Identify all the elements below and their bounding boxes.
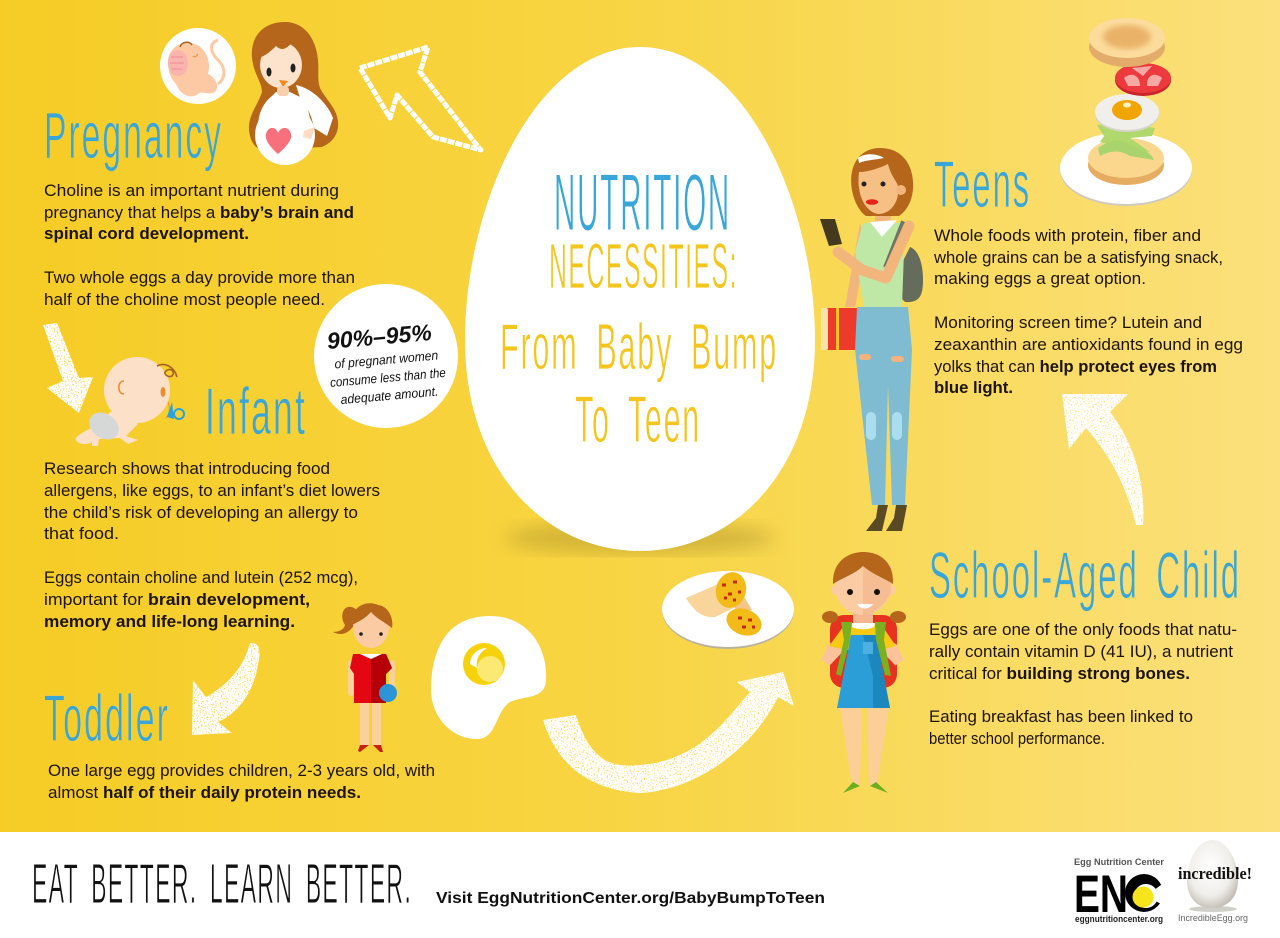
logo: incredible egg: incredible! xyxy=(1178,864,1252,883)
text: teens body: whole grains can be a satisfying snack, xyxy=(933,248,1223,267)
logo: incredible egg xyxy=(1178,840,1252,924)
callout: 90-95%: of pregnant women xyxy=(334,347,439,371)
icon: egg sandwich xyxy=(1060,18,1192,206)
text: school-aged body: critical for building strong bones. xyxy=(929,664,1190,683)
infographic canvas: NECESSITIES: xyxy=(549,230,738,302)
icon: pregnant woman xyxy=(249,22,338,165)
infographic canvas: Teens xyxy=(934,147,1031,221)
callout: 90-95%: adequate amount. xyxy=(340,384,439,407)
logo: incredible egg: IncredibleEgg.org xyxy=(1178,913,1248,924)
text: toddler body: almost half of their daily protein needs. xyxy=(48,783,361,802)
footer URL: Visit EggNutritionCenter.org/BabyBumpToTeen xyxy=(436,890,825,907)
logo: Egg Nutrition Center: eggnutritioncenter.org xyxy=(1075,914,1163,924)
text: teens body: yolks that can help protect eyes from xyxy=(934,357,1217,376)
icon: burrito plate xyxy=(662,569,794,649)
text: teens body: blue light. xyxy=(934,378,1013,397)
icon: fried egg xyxy=(431,616,546,739)
icon: fetus with brain xyxy=(160,28,236,104)
arrow: infant to toddler xyxy=(192,643,260,735)
text: infant body: Research shows that introducing food xyxy=(44,459,330,478)
text: teens body xyxy=(933,226,1243,397)
text: school-aged body: better school performance. xyxy=(929,729,1105,748)
text: infant body: that food. xyxy=(44,524,119,543)
infographic canvas: From Baby Bump xyxy=(500,310,778,383)
callout: 90-95%: 90%–95% xyxy=(326,319,433,354)
logo: Egg Nutrition Center: EN xyxy=(1074,865,1128,924)
text: infant body: the child’s risk of developing an allergy to xyxy=(44,503,358,522)
arrow: pregnancy to infant xyxy=(43,323,93,413)
text: school-aged body: Eggs are one of the only foods that natu- xyxy=(929,620,1237,639)
heading: Pregnancy: Pregnancy xyxy=(44,98,223,172)
text: school-aged body: rally contain vitamin D (41 IU), a nutrient xyxy=(929,642,1233,661)
text: school-aged body: Eating breakfast has been linked to xyxy=(929,707,1193,726)
arrow: egg to school-aged child xyxy=(543,672,794,793)
text: infant body xyxy=(44,459,380,631)
text: teens body: Monitoring screen time? Lutein and xyxy=(934,313,1202,332)
logo: Egg Nutrition Center: Egg Nutrition Center xyxy=(1074,857,1165,867)
infographic canvas: NUTRITION xyxy=(554,158,731,248)
heading: Infant: Infant xyxy=(205,374,307,448)
text: pregnancy body: Two whole eggs a day provide more than xyxy=(44,268,355,287)
arrow: school-aged to teens xyxy=(1062,394,1143,525)
text: teens body: zeaxanthin are antioxidants found in egg xyxy=(934,335,1243,354)
icon: toddler girl xyxy=(333,603,397,752)
text: teens body: Whole foods with protein, fiber and xyxy=(934,226,1201,245)
title: To Teen xyxy=(575,382,701,456)
text: pregnancy body: pregnancy that helps a baby’s brain and xyxy=(44,203,354,222)
heading: Toddler: Toddler xyxy=(44,681,170,755)
arrow: egg to pregnancy xyxy=(360,47,481,150)
text: pregnancy body: half of the choline most people need. xyxy=(44,290,325,309)
text: infant body: allergens, like eggs, to an infant’s diet lowers xyxy=(44,481,380,500)
text: infant body: important for brain development, xyxy=(44,590,310,609)
text: school-aged body xyxy=(929,620,1237,748)
callout: 90-95%: consume less than the xyxy=(329,365,446,390)
icon: crawling baby xyxy=(76,357,184,446)
text: infant body: memory and life-long learning. xyxy=(44,612,295,631)
text: pregnancy body: Choline is an important nutrient during xyxy=(44,181,339,200)
callout: 90-95% xyxy=(314,284,458,428)
text: pregnancy body xyxy=(44,181,355,309)
central egg xyxy=(465,47,815,554)
title xyxy=(500,158,778,456)
text: teens body: making eggs a great option. xyxy=(934,269,1146,288)
text: infant body: Eggs contain choline and lutein (252 mcg), xyxy=(44,568,358,587)
text: toddler body: One large egg provides children, 2-3 years old, with xyxy=(48,761,435,780)
text: pregnancy body: spinal cord development. xyxy=(44,224,249,243)
text: toddler body xyxy=(48,761,435,802)
icon: school-aged girl xyxy=(822,552,906,793)
icon: teen girl xyxy=(820,148,923,531)
infographic canvas: EAT BETTER. LEARN BETTER. xyxy=(32,852,412,916)
